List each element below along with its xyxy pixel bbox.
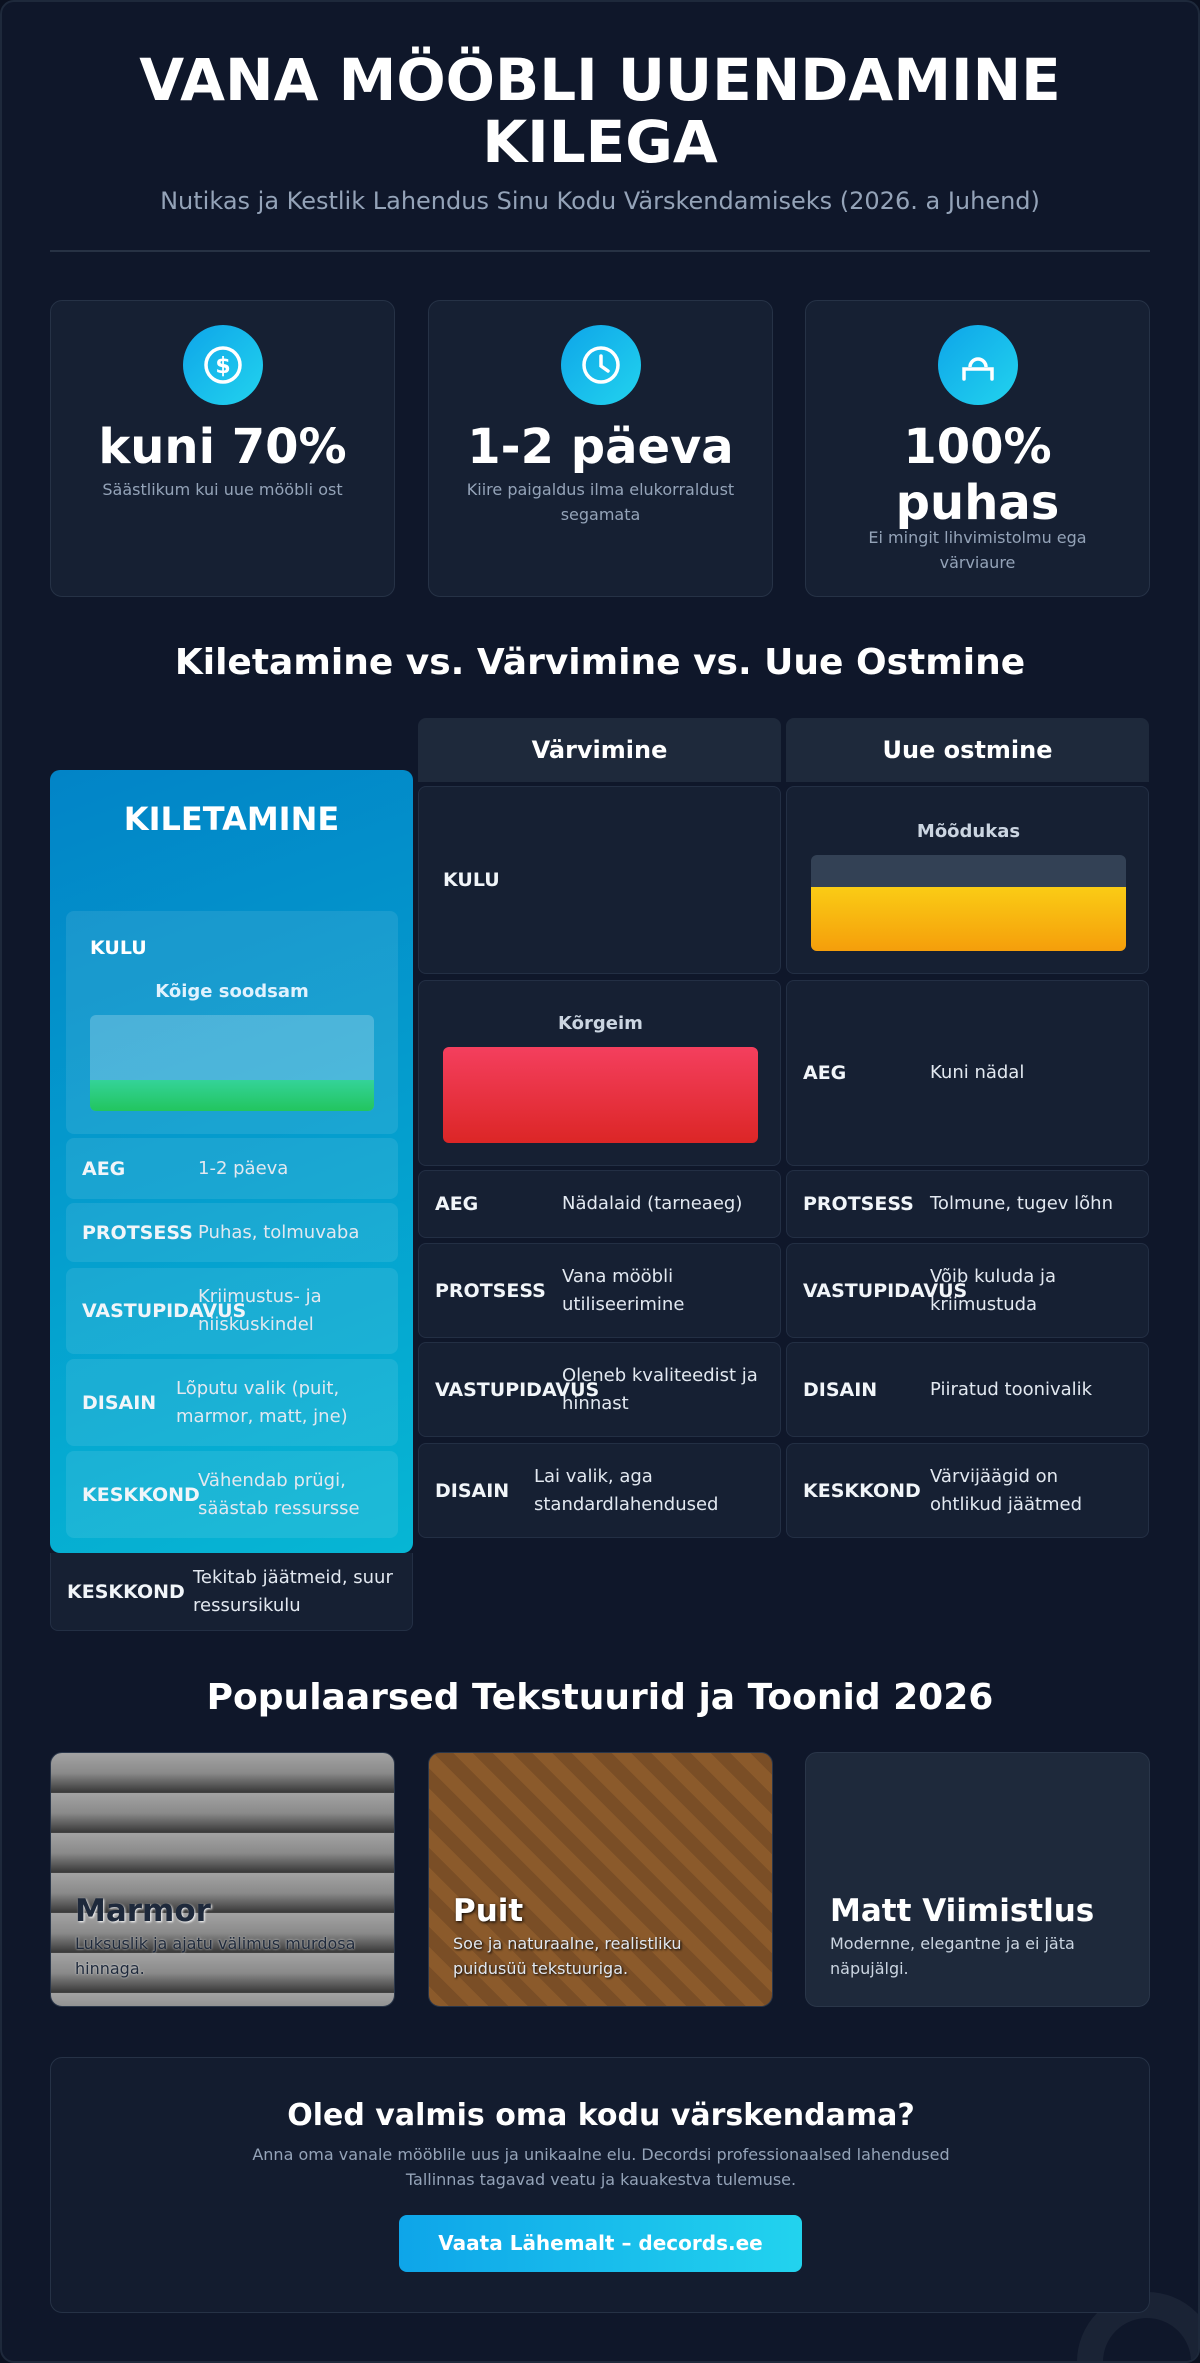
- row: KESKKOND: KESKKOND: [82, 1484, 200, 1506]
- texture card: Matt: Modernne, elegantne ja ei jäta näpujälgi.: [830, 1934, 1075, 1978]
- texture card: Matt: [805, 1752, 1150, 2007]
- row: VASTUPIDAVUS: VASTUPIDAVUS: [82, 1300, 246, 1322]
- icon: person: [938, 325, 1018, 405]
- comparison table: DISAIN: [803, 1378, 877, 1400]
- comparison table: Värvijäägid on ohtlikud jäätmed: [930, 1466, 1082, 1514]
- row: VASTUPIDAVUS: [66, 1268, 398, 1354]
- comparison table: Oleneb kvaliteedist ja hinnast: [562, 1364, 758, 1414]
- texture card: Marmor: [50, 1752, 395, 2007]
- column: Kiletamine: [50, 770, 413, 1553]
- comparison heading: Kiletamine vs. Värvimine vs. Uue Ostmine: [175, 642, 1025, 683]
- comparison table: Piiratud toonivalik: [930, 1378, 1092, 1400]
- CTA panel: [50, 2057, 1150, 2313]
- header: Värvimine: Värvimine: [532, 736, 667, 764]
- texture card: Marmor: Marmor: [75, 1893, 211, 1929]
- stat description: Ei mingit lihvimistolmu ega värviaure: [868, 528, 1087, 572]
- row: PROTSESS: PROTSESS: [82, 1222, 193, 1244]
- column title: KILETAMINE: [124, 800, 339, 838]
- stray cell: KESKKOND: Tekitab jäätmeid, suur ressursikulu: [193, 1566, 393, 1616]
- comparison table: AEG: [803, 1062, 846, 1084]
- header: Uue ostmine: [786, 718, 1149, 782]
- title: [139, 46, 1061, 176]
- bar: highest: [443, 1047, 758, 1143]
- comparison table: DISAIN: [435, 1480, 509, 1502]
- comparison table: PROTSESS: [435, 1280, 546, 1302]
- texture card: Matt: Matt Viimistlus: [830, 1893, 1094, 1929]
- texture card: Marmor: Luksuslik ja ajatu välimus murdosa hinnaga.: [75, 1934, 355, 1978]
- stat card: clean: [805, 300, 1150, 597]
- bar: moderate: [811, 855, 1126, 951]
- row: AEG: [66, 1138, 398, 1199]
- title: KILEGA: [482, 108, 718, 176]
- title: VANA MÖÖBLI UUENDAMINE: [139, 46, 1061, 114]
- stat description: Kiire paigaldus ilma elukorraldust segamata: [467, 480, 734, 524]
- row: KESKKOND: [66, 1451, 398, 1538]
- stat value: [896, 419, 1059, 531]
- comparison table: Nädalaid (tarneaeg): [562, 1193, 742, 1214]
- comparison table: Kuni nädal: [930, 1062, 1024, 1083]
- icon: clock: [560, 325, 640, 405]
- stat value: 1-2 päeva: [467, 419, 734, 475]
- icon: money: [182, 325, 262, 405]
- texture card: Puit: Soe ja naturaalne, realistliku puidusüü tekstuuriga.: [453, 1934, 682, 1978]
- comparison table: Vana mööbli utiliseerimine: [562, 1266, 684, 1314]
- texture card: Puit: Puit: [453, 1893, 523, 1929]
- row: KULU: Kõige soodsam: [155, 981, 309, 1002]
- bar: cheapest: [90, 1015, 374, 1111]
- header: Värvimine: [418, 718, 781, 782]
- row: PROTSESS: [66, 1203, 398, 1262]
- stray cell: KESKKOND: [50, 1553, 413, 1631]
- stat value: 100%: [903, 419, 1052, 475]
- comparison table: VASTUPIDAVUS: [435, 1378, 599, 1400]
- row: KULU: KULU: [90, 937, 147, 959]
- icon: money: $: [215, 354, 230, 379]
- row: DISAIN: DISAIN: [82, 1392, 156, 1414]
- row: KULU: [66, 911, 398, 1134]
- CTA heading: Oled valmis oma kodu värskendama?: [287, 2098, 915, 2133]
- watermark logo: [1077, 2292, 1200, 2363]
- texture card: Puit: [428, 1752, 773, 2007]
- stat description: Säästlikum kui uue mööbli ost: [102, 480, 343, 499]
- textures heading: Populaarsed Tekstuurid ja Toonid 2026: [207, 1677, 993, 1718]
- stat value: kuni 70%: [98, 419, 347, 475]
- CTA button: Vaata Lähemalt – decords.ee: [438, 2231, 763, 2255]
- stray cell: KESKKOND: KESKKOND: [67, 1580, 185, 1602]
- comparison table: AEG: [435, 1193, 478, 1215]
- row: PROTSESS: Puhas, tolmuvaba: [198, 1222, 359, 1242]
- stat card: cost: [50, 300, 395, 597]
- row: KESKKOND: Vähendab prügi, säästab ressursse: [198, 1470, 360, 1518]
- comparison table: Kõrgeim: [558, 1013, 643, 1034]
- Uue ostmine cells: [786, 786, 1149, 974]
- CTA text: Anna oma vanale mööblile uus ja unikaalne elu. Decordsi professionaalsed lahendused Tallinnas tagavad veatu ja kauakestva tulemuse.: [252, 2145, 950, 2189]
- comparison table: Võib kuluda ja kriimustuda: [930, 1266, 1056, 1314]
- row: AEG: AEG: [82, 1158, 125, 1180]
- row: DISAIN: Lõputu valik (puit, marmor, matt, jne): [176, 1378, 348, 1426]
- stat card: time: [428, 300, 773, 597]
- row: AEG: 1-2 päeva: [198, 1158, 288, 1178]
- comparison table: Lai valik, aga standardlahendused: [534, 1466, 718, 1514]
- header: Uue ostmine: Uue ostmine: [882, 736, 1053, 764]
- Värvimine cells: KULU: [443, 869, 500, 891]
- comparison table: [50, 718, 1149, 1631]
- subtitle: Nutikas ja Kestlik Lahendus Sinu Kodu Värskendamiseks (2026. a Juhend): [160, 187, 1040, 215]
- CTA button: [399, 2215, 802, 2272]
- row: VASTUPIDAVUS: Kriimustus- ja niiskuskindel: [198, 1286, 322, 1335]
- row: DISAIN: [66, 1359, 398, 1446]
- stat value: puhas: [896, 475, 1059, 531]
- Värvimine cells: [418, 786, 781, 974]
- comparison table: KESKKOND: [803, 1480, 921, 1502]
- comparison table: VASTUPIDAVUS: [803, 1280, 967, 1302]
- comparison table: PROTSESS: [803, 1193, 914, 1215]
- Uue ostmine cells: Mõõdukas: [917, 821, 1020, 842]
- comparison table: Tolmune, tugev lõhn: [930, 1193, 1113, 1214]
